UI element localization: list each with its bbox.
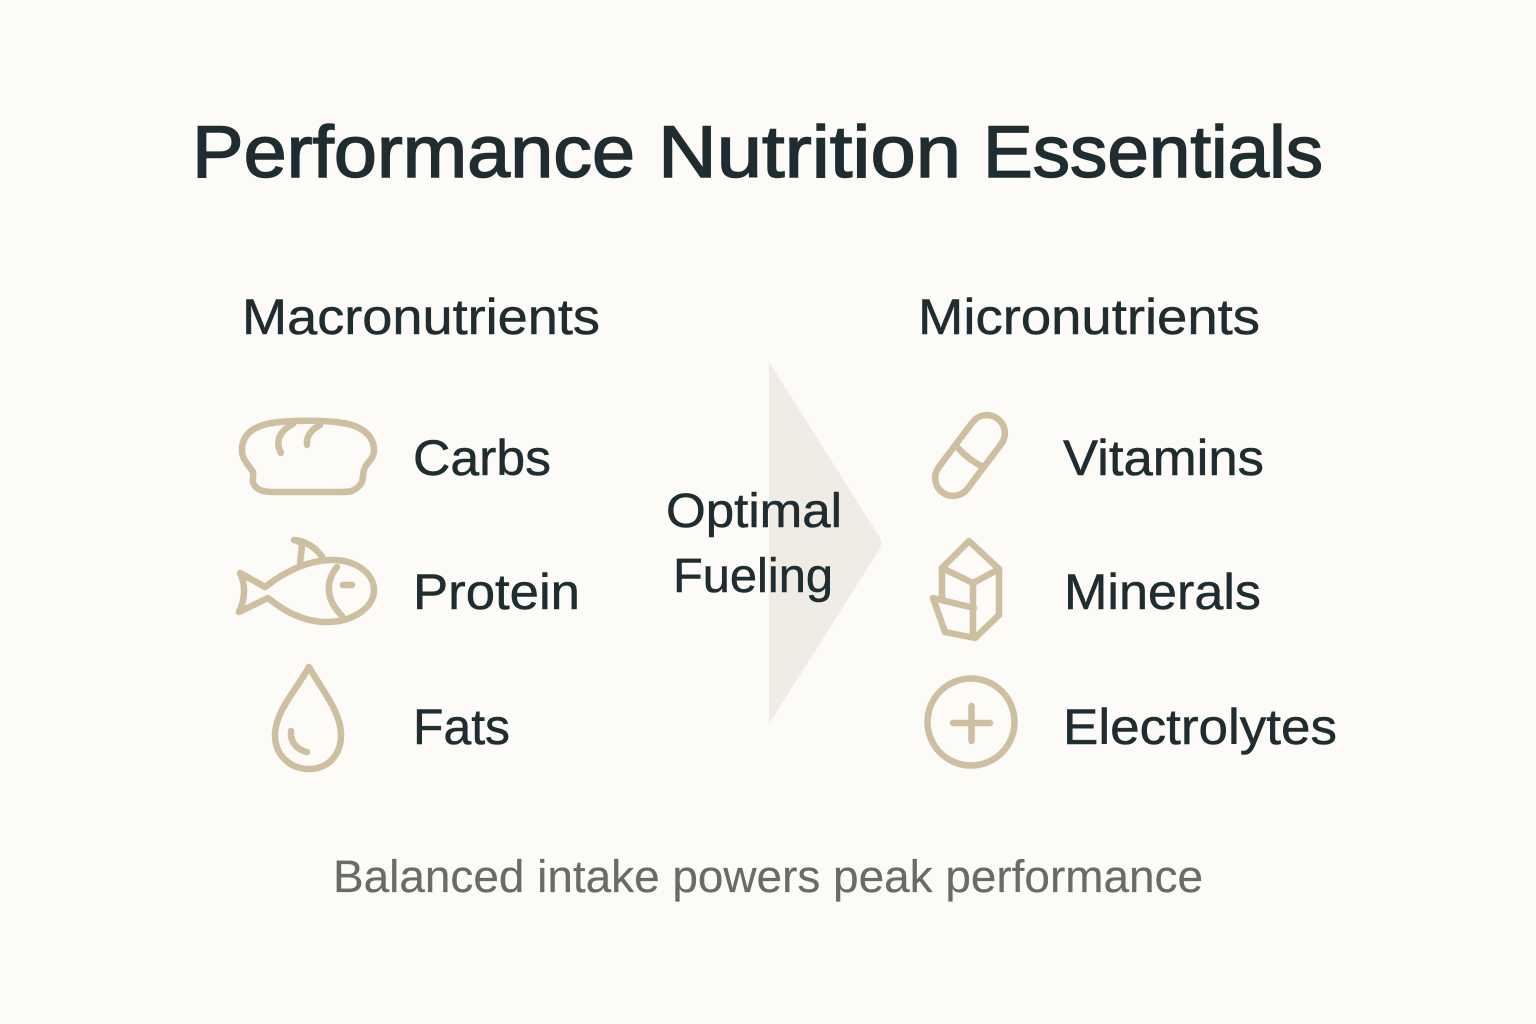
icon: fish — [239, 540, 374, 622]
icon: electrolyte plus circle — [928, 678, 1014, 766]
arrow label: optimal fueling: Optimal — [666, 485, 842, 538]
label: vitamins: Vitamins — [1063, 430, 1264, 486]
label: electrolytes: Electrolytes — [1063, 699, 1337, 755]
label: carbs: Carbs — [413, 430, 551, 486]
icon: fat drop — [275, 667, 341, 769]
arrow label: optimal fueling — [666, 485, 842, 603]
icon: vitamin capsule — [928, 408, 1012, 503]
title — [192, 112, 1323, 193]
title: Nutrition — [658, 112, 961, 193]
panel: micronutrients — [918, 289, 1337, 766]
label: protein: Protein — [413, 564, 580, 620]
panel: macronutrients — [239, 289, 600, 769]
label: minerals: Minerals — [1064, 564, 1261, 620]
icon: mineral crystal — [933, 541, 999, 638]
footer tagline: Balanced intake powers peak performance — [333, 851, 1203, 902]
label: fats: Fats — [413, 699, 510, 755]
heading: macronutrients: Macronutrients — [242, 289, 600, 345]
title: Essentials — [983, 112, 1323, 193]
arrow: optimal fueling — [769, 362, 881, 724]
arrow label: optimal fueling: Fueling — [673, 550, 833, 603]
heading: micronutrients: Micronutrients — [918, 289, 1260, 345]
icon: bread — [242, 421, 374, 492]
title: Performance — [192, 112, 635, 193]
